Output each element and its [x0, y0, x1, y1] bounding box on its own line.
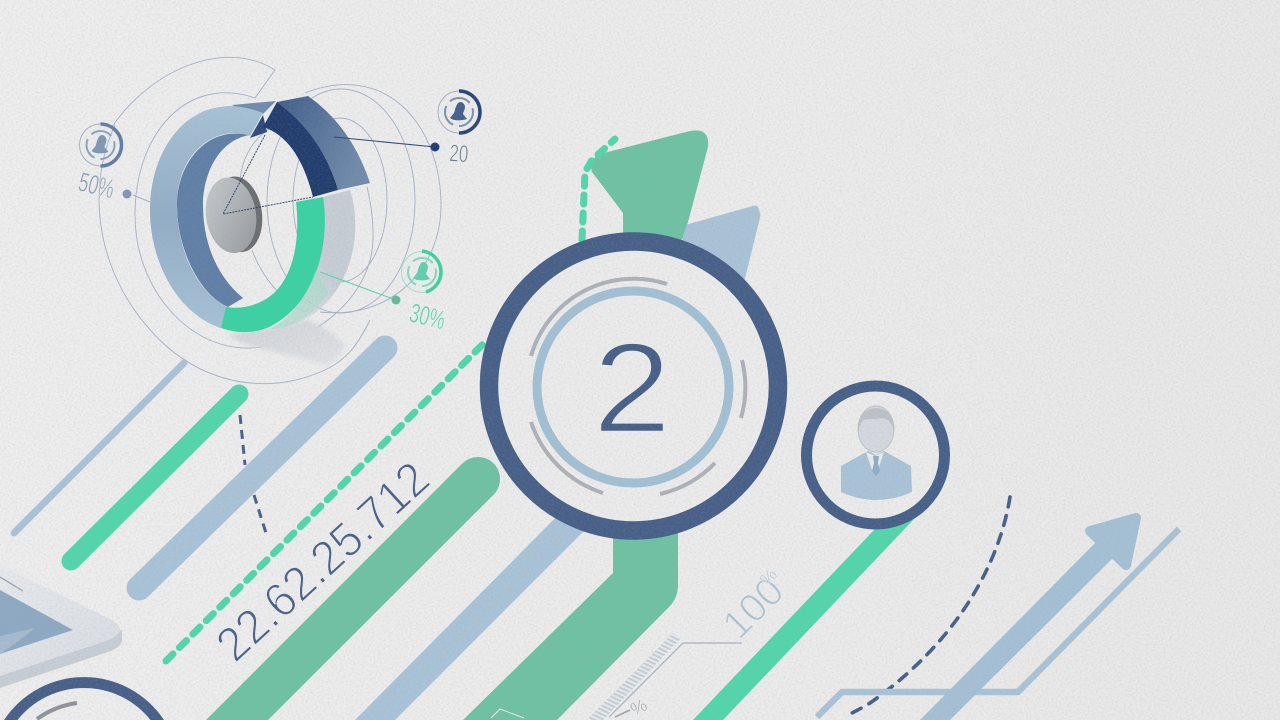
- orbit rings: [99, 57, 441, 384]
- bottom circle: [4, 677, 164, 720]
- green segment: [221, 197, 325, 332]
- icon: person hair: [858, 408, 894, 432]
- wide green bar: [206, 457, 500, 720]
- thin stepped line: [817, 529, 1179, 717]
- number 2: 2: [593, 316, 671, 460]
- top edge of the light segment: [232, 101, 276, 114]
- label: 20: 20: [449, 140, 469, 168]
- dashed green line: [166, 341, 486, 661]
- grey arc segments: [531, 279, 745, 494]
- centre disc: [201, 173, 267, 256]
- label: 100%: %: [756, 564, 781, 590]
- light-blue front face: [150, 106, 263, 328]
- dashed green path to arrow: [582, 139, 615, 240]
- icon: shirt and tie: [866, 452, 884, 472]
- grey donut side: [273, 190, 355, 330]
- badge: 30%: [402, 251, 442, 292]
- number text: 22.62.25.712: 22.62.25.712: [207, 452, 440, 672]
- light-blue diagonal bar: [355, 493, 620, 720]
- green line below person circle: [693, 500, 916, 720]
- badge: 20: [438, 91, 480, 133]
- large light-blue arrow: [920, 518, 1136, 720]
- tablet face: [0, 565, 120, 676]
- tablet speaker: [0, 577, 23, 591]
- navy wedge tip: [250, 115, 267, 138]
- tablet device: [0, 565, 122, 688]
- small percent label and line: [615, 695, 650, 720]
- green arrow: head: [591, 130, 708, 250]
- badge: 50%: [80, 124, 122, 166]
- blue arrowhead behind the circle: [684, 209, 757, 280]
- dashed navy curve: [846, 497, 1010, 716]
- dashed navy connector: [240, 415, 266, 533]
- thin light-blue bar: [14, 363, 184, 533]
- small percent label and line: %: [627, 695, 650, 720]
- label: 30%: 30%: [407, 297, 449, 335]
- green fade on the side: [270, 270, 328, 329]
- navy wedge front: [263, 102, 338, 197]
- grey arc: [37, 703, 77, 719]
- label: 50%: 50%: [76, 166, 118, 204]
- icon: person head: [858, 406, 894, 452]
- white outline icon on the green bar: [491, 709, 524, 718]
- navy wedge side: [277, 96, 370, 190]
- wide light-blue bar: [139, 348, 385, 588]
- green arrow: stem: [463, 520, 678, 720]
- outer ring: [489, 242, 778, 530]
- leader lines and dots: [122, 137, 440, 304]
- hatched strip: [587, 633, 680, 720]
- tablet side: [0, 630, 122, 688]
- person circle: [806, 386, 944, 524]
- inner wall of the light segment: [177, 133, 250, 307]
- donut chart with orbit rings: [99, 57, 441, 384]
- dotted wedge guides: [223, 135, 313, 214]
- green bar: [71, 394, 239, 561]
- tablet screen: [0, 590, 73, 654]
- donut shadow: [227, 320, 345, 365]
- main number circle: [489, 242, 778, 530]
- 100% leader line: [609, 643, 742, 717]
- icon: person body: [841, 451, 912, 500]
- inner light-blue ring: [537, 291, 729, 483]
- screen reflection: [0, 628, 35, 654]
- label: 100%: 100: [714, 569, 793, 647]
